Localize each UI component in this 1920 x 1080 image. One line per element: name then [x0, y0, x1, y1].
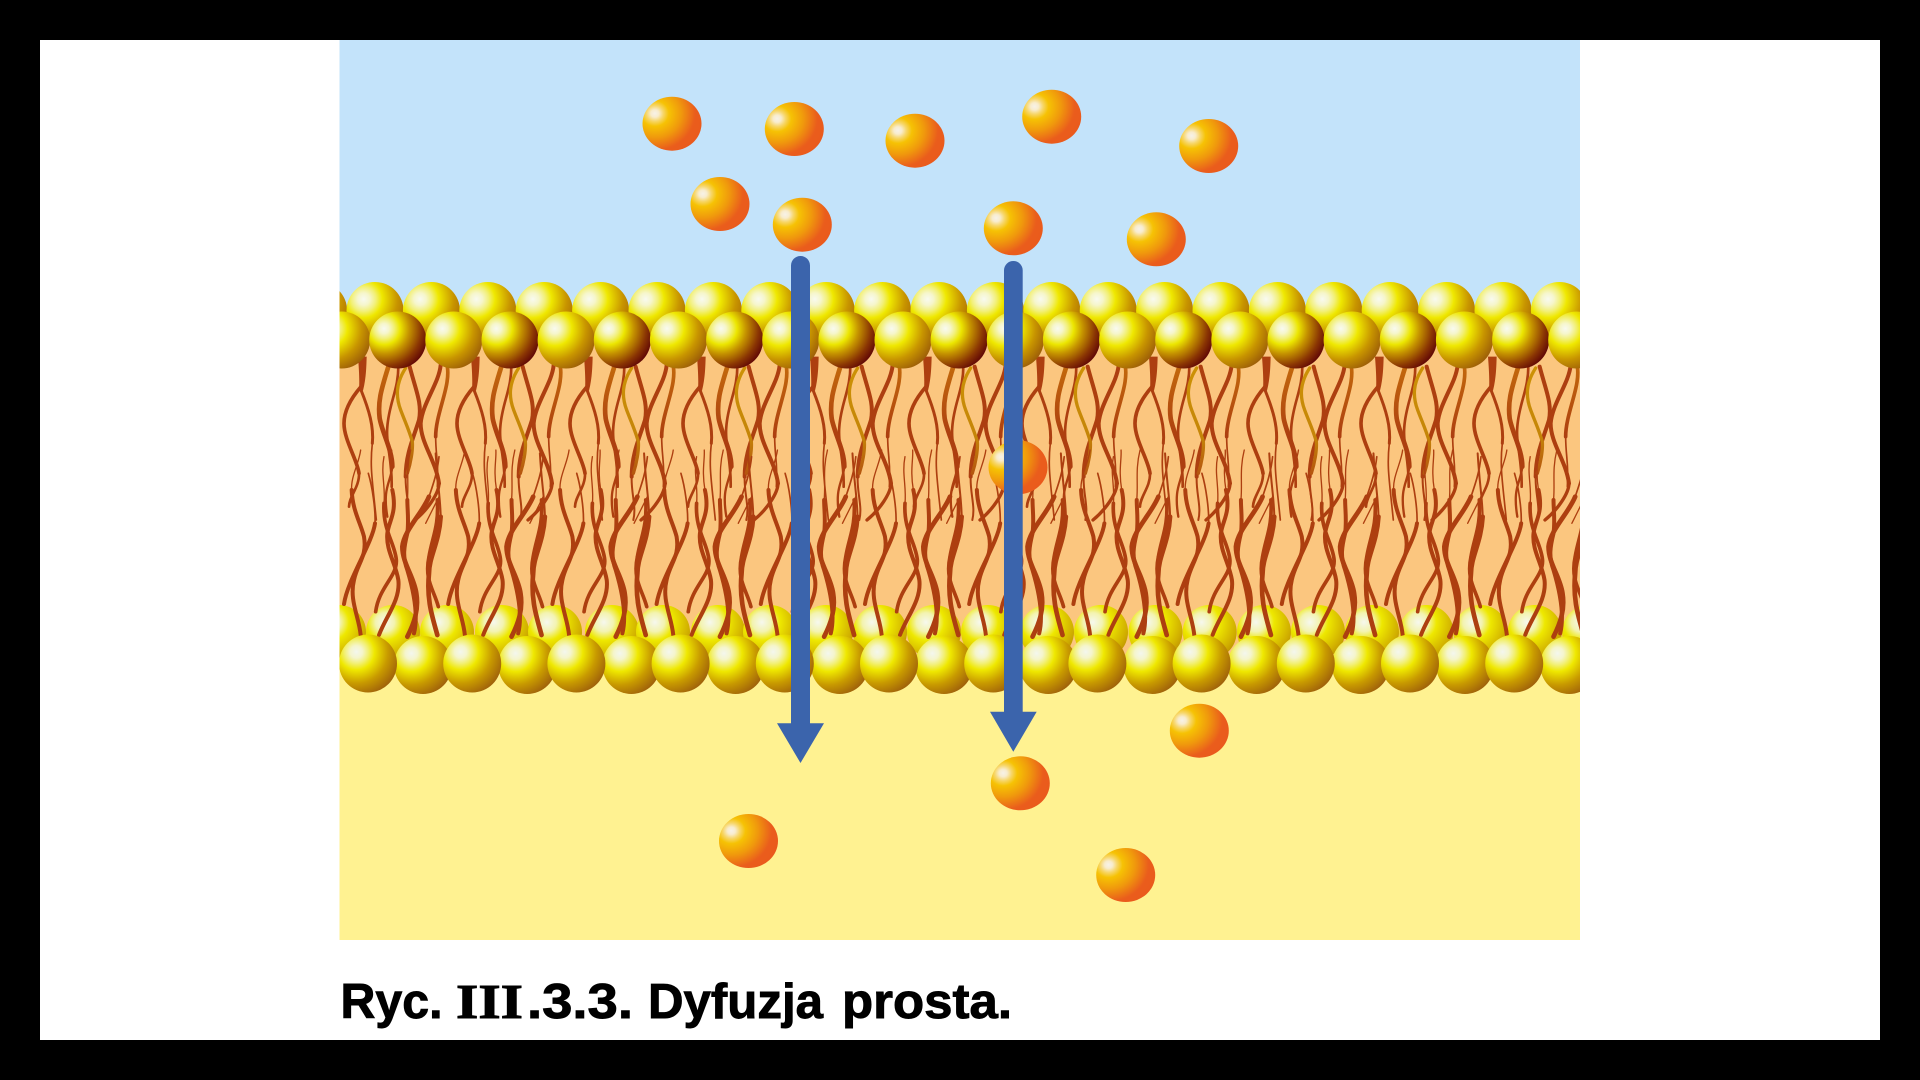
- lower leaflet: back row of phospholipid heads: [312, 605, 1616, 659]
- region: orange hydrophobic membrane core: [340, 340, 1580, 665]
- caption: III: [456, 974, 523, 1029]
- caption: Dyfuzja: [648, 975, 824, 1029]
- caption: .3.3.: [527, 975, 633, 1029]
- caption: prosta.: [842, 975, 1012, 1029]
- arrow: right diffusion direction: [990, 261, 1037, 752]
- lower leaflet fatty acid tails: [240, 450, 1587, 637]
- region: extracellular blue fluid: [340, 40, 1580, 307]
- caption: Ryc.: [340, 975, 442, 1029]
- arrow: left diffusion direction: [777, 256, 824, 763]
- upper leaflet fatty acid tails: [231, 357, 1578, 520]
- diffused molecules below the membrane: [719, 704, 1229, 902]
- upper leaflet: front row of phospholipid heads: [313, 312, 1605, 368]
- region: yellow intracellular fluid: [340, 665, 1580, 940]
- diffusing molecule inside the membrane: [988, 440, 1048, 494]
- panel: diffusion diagram: [340, 40, 1580, 940]
- diffusing molecules above the membrane: [642, 90, 1238, 266]
- upper leaflet: back row of phospholipid heads: [290, 282, 1588, 339]
- lower leaflet: front row of phospholipid heads: [339, 634, 1598, 694]
